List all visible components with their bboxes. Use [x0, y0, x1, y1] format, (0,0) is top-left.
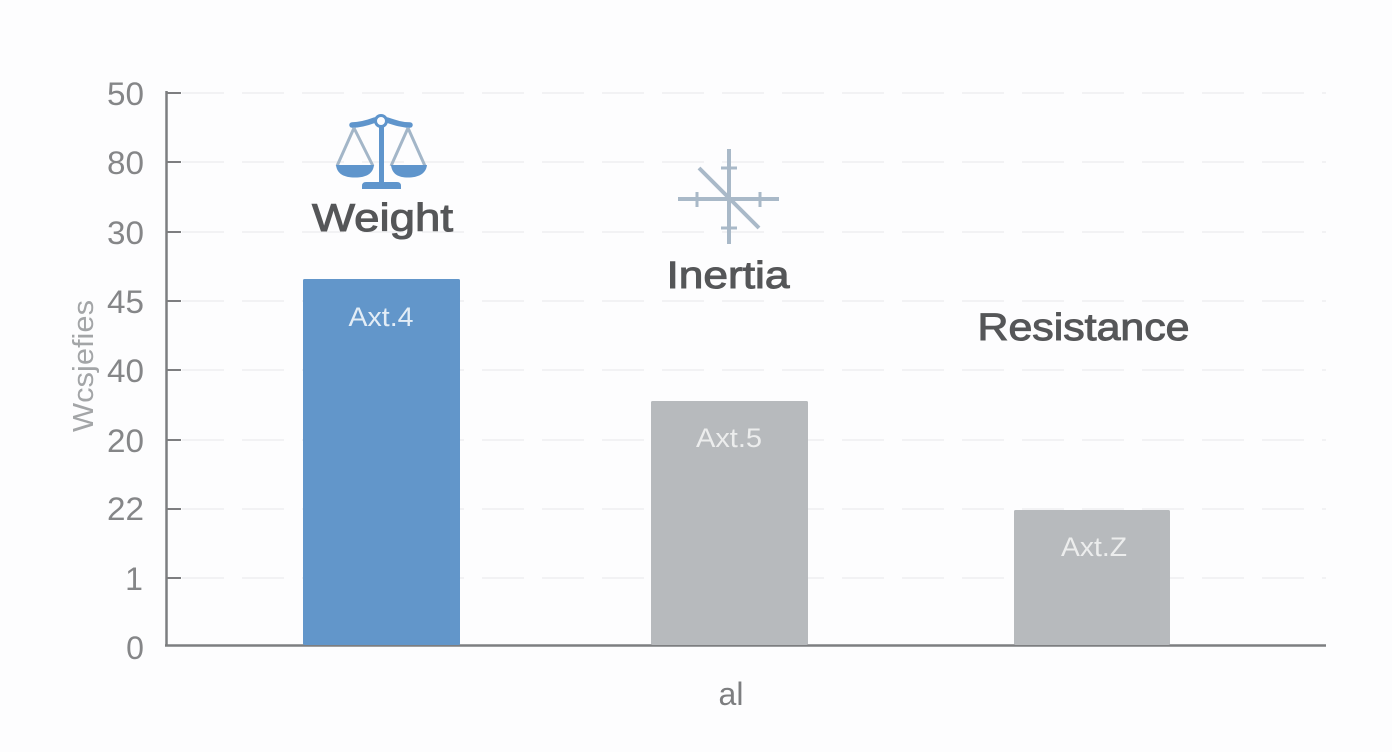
heading: Resistance: Resistance	[978, 307, 1190, 349]
bar: Resistance	[1014, 510, 1170, 645]
icon: balance scale	[336, 116, 427, 189]
y axis tick labels	[107, 76, 144, 666]
axes	[165, 91, 1326, 646]
y axis tick labels: 22	[107, 491, 144, 527]
heading: Weight: Weight	[312, 197, 453, 240]
y axis tick labels: 40	[107, 353, 144, 389]
icon: inertia axes	[678, 149, 779, 244]
y axis tick labels: 30	[107, 215, 144, 251]
y axis tick labels: 50	[107, 76, 144, 112]
bar: Inertia	[651, 401, 808, 645]
y axis tick labels: 0	[126, 630, 144, 666]
bar: Weight	[303, 279, 460, 645]
y axis tick labels: 1	[125, 561, 143, 597]
bar: Weight: Axt.4	[348, 302, 414, 332]
x axis title: al	[719, 676, 743, 712]
y axis tick labels: 80	[107, 145, 144, 181]
y axis title: Wcsjefies	[68, 300, 100, 432]
bar: Inertia: Axt.5	[696, 423, 762, 453]
y axis tick labels: 20	[107, 423, 144, 459]
heading: Inertia: Inertia	[666, 255, 790, 297]
bar: Resistance: Axt.Z	[1061, 532, 1127, 562]
y axis tick labels: 45	[107, 284, 144, 320]
